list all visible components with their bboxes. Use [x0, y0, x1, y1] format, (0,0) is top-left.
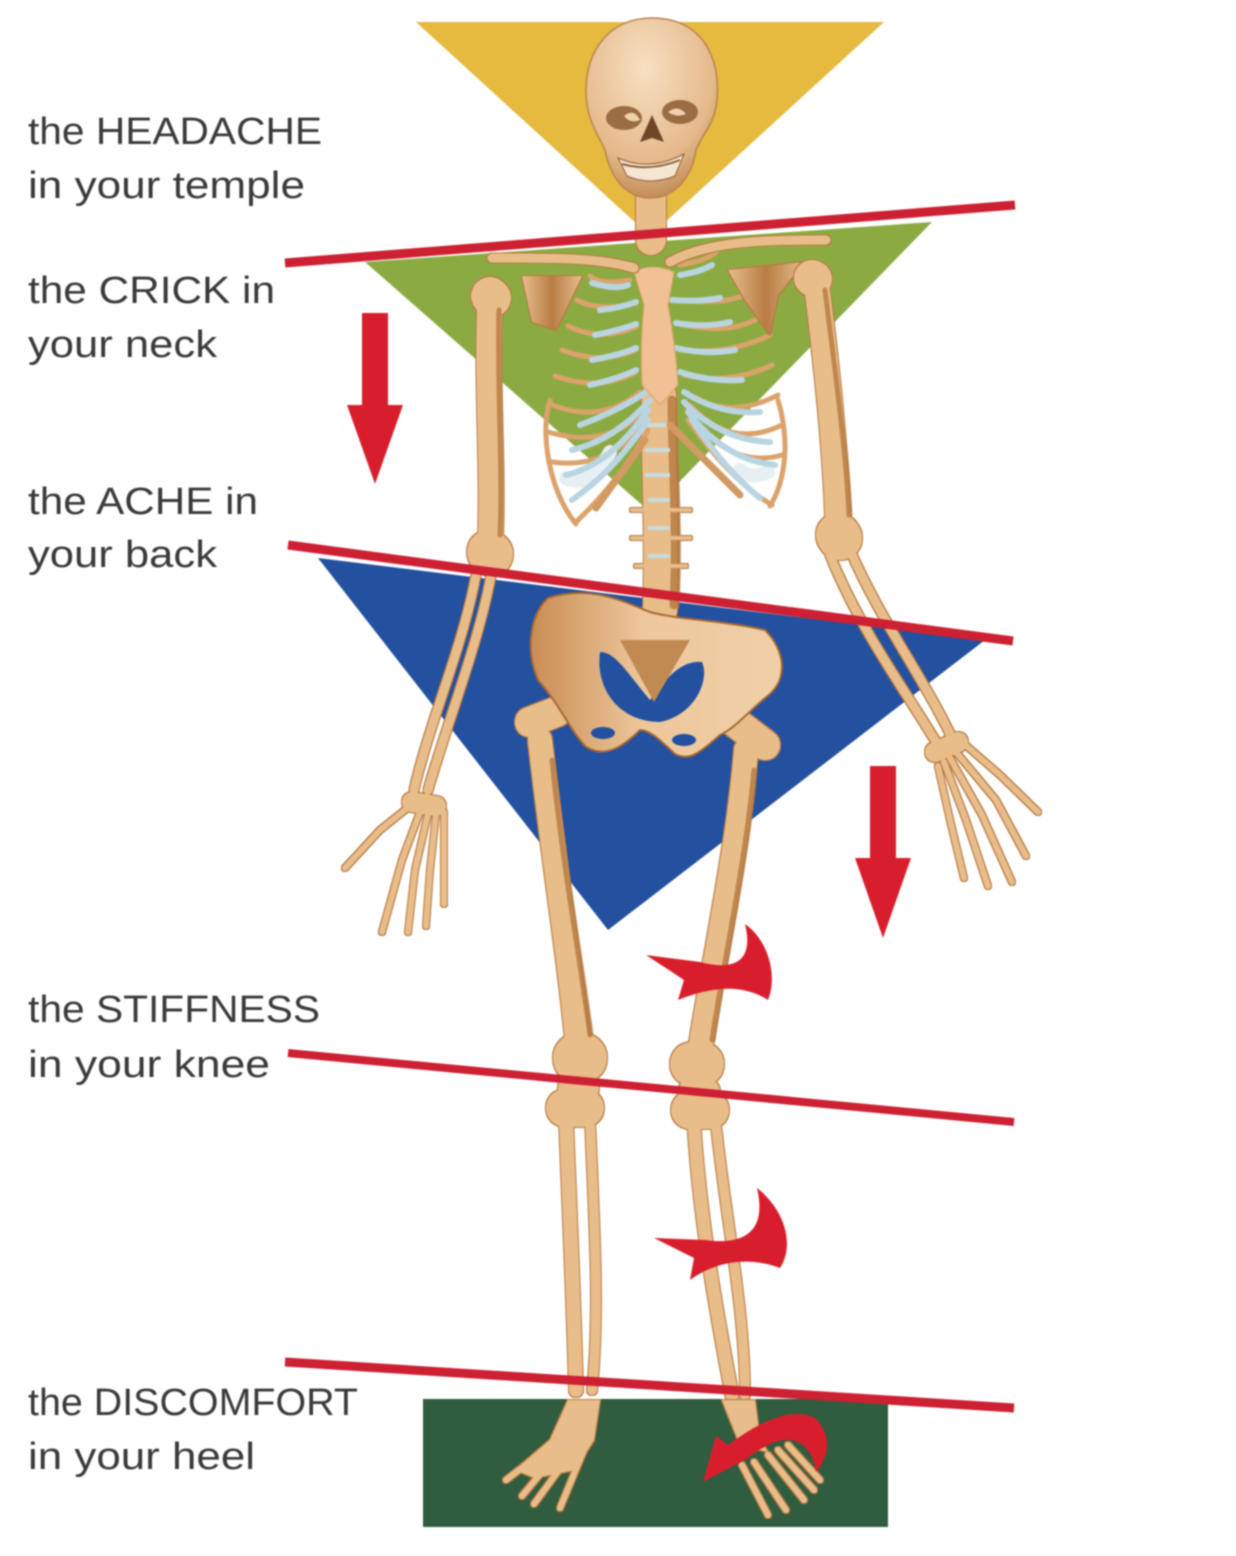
curved arrow: foot rotation — [703, 1414, 827, 1482]
red line: hips — [288, 545, 1013, 641]
yellow triangle: head — [416, 22, 884, 236]
skeleton clavicles and shoulder blades — [492, 240, 826, 335]
arrow: downward lower right — [855, 766, 911, 938]
blue triangle: pelvis — [318, 558, 985, 930]
label: stiffness: in your knee — [28, 1044, 270, 1086]
label: headache: the HEADACHE — [28, 111, 322, 153]
label: ache: the ACHE in — [28, 481, 258, 523]
skeleton right foot — [722, 1400, 820, 1515]
skeleton — [345, 18, 1038, 1515]
label: crick: your neck — [28, 324, 218, 366]
label: ache: your back — [28, 534, 218, 576]
arrow: downward upper left — [347, 313, 403, 484]
red line: shoulders — [285, 205, 1015, 263]
green triangle: shoulders and chest — [365, 222, 932, 512]
label: stiffness: the STIFFNESS — [28, 989, 320, 1031]
skeleton legs — [530, 712, 765, 1395]
skeleton left foot — [506, 1400, 600, 1508]
skeleton left arm and hand — [345, 296, 501, 932]
label: discomfort: the DISCOMFORT — [28, 1382, 358, 1424]
red line: knees — [288, 1053, 1014, 1122]
skeleton right arm and hand — [812, 278, 1038, 886]
curved arrow: shin rotation — [654, 1188, 787, 1280]
label: discomfort: in your heel — [28, 1436, 255, 1478]
skeleton pelvis — [531, 593, 782, 757]
skeleton skull — [586, 18, 717, 198]
skeleton sternum — [634, 267, 678, 405]
skeleton spine and neck — [632, 190, 690, 610]
label: crick: the CRICK in — [28, 270, 275, 312]
label: headache: in your temple — [28, 165, 305, 207]
curved arrow: thigh rotation — [646, 924, 772, 1000]
skeleton ribcage — [546, 250, 785, 524]
dark green rectangle: feet — [423, 1399, 888, 1527]
red line: ankles — [285, 1362, 1014, 1408]
